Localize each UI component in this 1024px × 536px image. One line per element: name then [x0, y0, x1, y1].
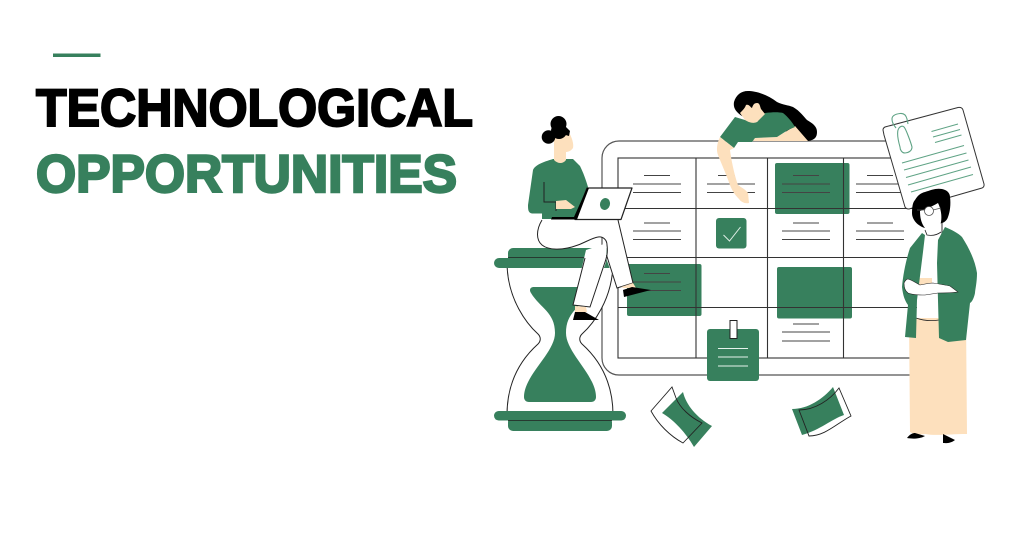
- standing woman face: [920, 203, 941, 235]
- woman arm left: [717, 137, 749, 203]
- standing woman shoes: [907, 433, 925, 439]
- standing woman hands: [904, 279, 958, 295]
- title: technological: TECHNOLOGICAL: [36, 79, 473, 138]
- green calendar cell: left: [627, 264, 702, 316]
- skirt: [909, 318, 967, 435]
- paper clip: [892, 113, 912, 153]
- green calendar cell: top: [775, 163, 850, 214]
- man torso: [528, 159, 588, 219]
- illustration: fallen paper left: [651, 387, 712, 447]
- woman hair: [734, 91, 817, 141]
- illustration: standing woman: [902, 189, 977, 443]
- glasses: [917, 206, 941, 216]
- laptop: [575, 188, 632, 220]
- standing woman hair: [912, 189, 950, 228]
- woman head: [740, 103, 765, 123]
- jacket: [902, 233, 925, 338]
- accent dash: [53, 54, 100, 57]
- illustration: woman leaning over board: [717, 91, 817, 203]
- illustration: hourglass: [494, 248, 626, 431]
- illustration: calendar board: [602, 141, 942, 381]
- man hand: [556, 200, 575, 209]
- green calendar cell: right: [777, 267, 852, 318]
- woman arm right: [753, 126, 808, 141]
- man head: [554, 131, 573, 163]
- title: opportunities: OPPORTUNITIES: [36, 145, 457, 204]
- man hair: [542, 116, 570, 144]
- paper lines: [902, 124, 973, 192]
- checkbox: [716, 218, 746, 248]
- calendar grid: [618, 158, 928, 358]
- illustration: fallen paper right: [792, 387, 851, 436]
- pinned note: [707, 320, 759, 381]
- illustration: paper with clip: [883, 107, 984, 209]
- woman body: [720, 112, 795, 148]
- man shoes: [575, 306, 587, 312]
- calendar text lines: [633, 176, 904, 341]
- man legs: [538, 220, 633, 288]
- illustration: man with laptop: [528, 116, 651, 320]
- shirt: [917, 232, 941, 318]
